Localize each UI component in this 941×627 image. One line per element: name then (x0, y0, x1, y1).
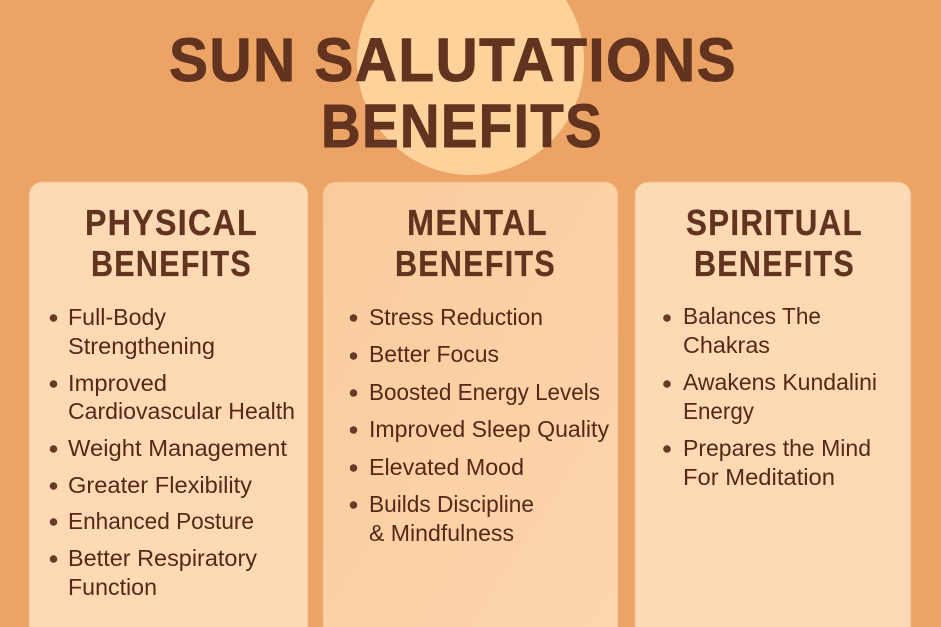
panel: spiritual benefits (635, 182, 911, 627)
list: physical benefits: Better Respiratory (68, 545, 257, 571)
list: physical benefits: Cardiovascular Health (68, 398, 295, 424)
list: mental benefits: Boosted Energy Levels (369, 379, 600, 405)
heading: spiritual benefits: SPIRITUAL (686, 202, 863, 243)
title (169, 26, 737, 160)
list: physical benefits (50, 304, 295, 600)
list: physical benefits: Strengthening (68, 333, 215, 359)
list: spiritual benefits: Awakens Kundalini (683, 369, 877, 395)
list: mental benefits: Better Focus (369, 341, 499, 367)
heading: mental benefits (395, 202, 556, 284)
heading: spiritual benefits: BENEFITS (694, 243, 855, 284)
panel: mental benefits (323, 182, 618, 627)
heading: physical benefits (85, 202, 258, 284)
panel: physical benefits (29, 182, 308, 627)
list: spiritual benefits: Chakras (683, 332, 770, 358)
list: spiritual benefits: For Meditation (683, 464, 835, 490)
list: physical benefits: Function (68, 574, 157, 600)
list: mental benefits: Elevated Mood (369, 454, 524, 480)
icon: sun circle (357, 0, 584, 175)
list: physical benefits: Enhanced Posture (68, 508, 254, 534)
list: mental benefits: Stress Reduction (369, 304, 543, 330)
list: physical benefits: Full-Body (68, 304, 166, 330)
heading: mental benefits: BENEFITS (395, 243, 556, 284)
title: BENEFITS (321, 92, 603, 160)
list: physical benefits: Greater Flexibility (68, 472, 253, 498)
heading: physical benefits: BENEFITS (91, 243, 252, 284)
list: physical benefits: Improved (68, 370, 167, 396)
list: mental benefits: Builds Discipline (369, 491, 534, 517)
heading: mental benefits: MENTAL (407, 202, 548, 243)
list: spiritual benefits: Balances The (683, 303, 821, 329)
list: mental benefits: & Mindfulness (369, 520, 514, 546)
heading: spiritual benefits (686, 202, 863, 284)
list: spiritual benefits: Prepares the Mind (683, 435, 871, 461)
title: SUN SALUTATIONS (169, 26, 737, 94)
list: physical benefits: Weight Management (68, 435, 288, 461)
list: mental benefits: Improved Sleep Quality (369, 416, 609, 442)
list: spiritual benefits: Energy (683, 398, 754, 424)
heading: physical benefits: PHYSICAL (85, 202, 258, 243)
list: spiritual benefits (663, 303, 877, 490)
list: mental benefits (350, 304, 609, 546)
